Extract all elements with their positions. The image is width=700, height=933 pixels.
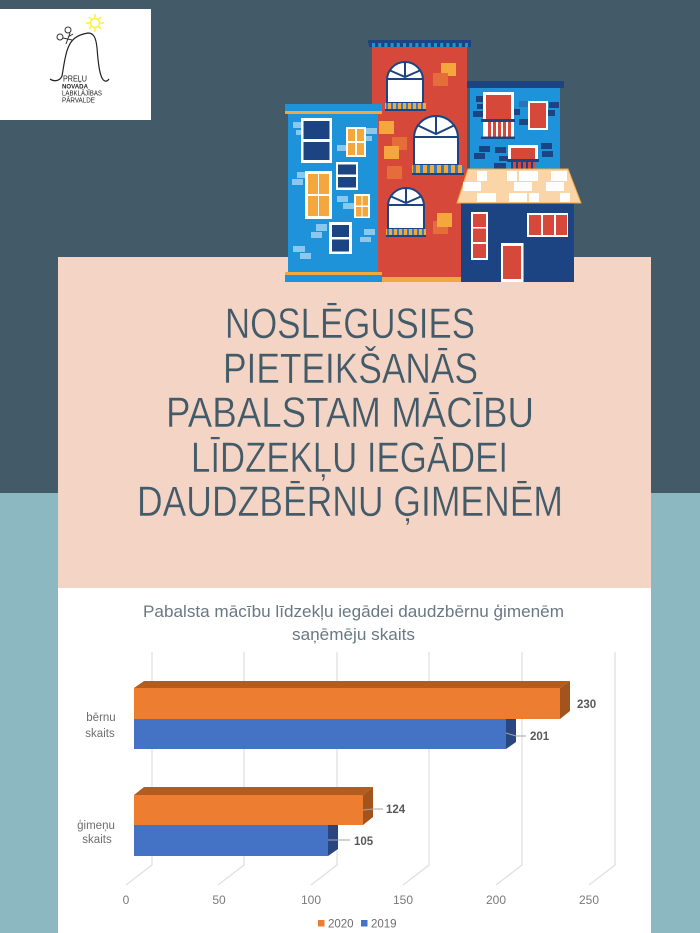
logo: Preiļu novada Labklājības pārvalde: PĀRVALDE xyxy=(62,96,95,104)
panel: chart card xyxy=(58,588,651,933)
legend xyxy=(318,918,397,930)
bar: bērnu skaits 2019 = 201 xyxy=(134,719,516,749)
logo: Preiļu novada Labklājības pārvalde: PREĻU xyxy=(63,74,87,84)
x axis labels: 200 xyxy=(486,893,506,907)
chart: 3D horizontal bar chart xyxy=(77,602,615,930)
building: red tower xyxy=(368,40,471,282)
title: DAUDZBĒRNU ĢIMENĒM xyxy=(137,478,563,526)
bar: ģimeņu skaits 2020 = 124 xyxy=(134,787,373,825)
category labels xyxy=(77,712,116,846)
logo: Preiļu novada Labklājības pārvalde: NOVADA xyxy=(62,84,88,90)
title xyxy=(137,300,563,526)
chart title: saņēmēju skaits xyxy=(292,625,415,644)
illustration: row of houses xyxy=(285,40,581,282)
chart title xyxy=(143,602,564,644)
title: PIETEIKŠANĀS xyxy=(223,345,478,393)
panel: title card xyxy=(58,257,651,588)
legend: 2020 xyxy=(328,918,354,930)
logo: Preiļu novada Labklājības pārvalde: LABKLĀJĪBAS xyxy=(62,90,102,98)
chart title: Pabalsta mācību līdzekļu iegādei daudzbērnu ģimenēm xyxy=(143,602,564,621)
building: left blue house xyxy=(285,104,382,282)
title: LĪDZEKĻU IEGĀDEI xyxy=(191,434,508,482)
category labels: skaits xyxy=(82,834,112,846)
building: navy house with tiled roof xyxy=(457,169,581,282)
category labels: bērnu xyxy=(86,712,116,724)
x axis labels: 100 xyxy=(301,893,321,907)
x axis labels: 250 xyxy=(579,893,599,907)
value labels: 124 xyxy=(386,804,406,816)
category labels: ģimeņu xyxy=(77,819,115,832)
value labels: 105 xyxy=(354,836,374,848)
category labels: skaits xyxy=(85,728,115,740)
title: PABALSTAM MĀCĪBU xyxy=(166,389,534,437)
legend: 2019 xyxy=(371,918,397,930)
background: teal lower band xyxy=(0,493,700,933)
value labels: 230 xyxy=(577,699,596,711)
value labels xyxy=(354,699,596,848)
x axis labels: 150 xyxy=(393,893,413,907)
bar: ģimeņu skaits 2019 = 105 xyxy=(134,825,338,856)
building: right blue house xyxy=(467,81,564,172)
bar: bērnu skaits 2020 = 230 xyxy=(134,681,570,719)
x axis labels xyxy=(123,893,599,907)
background: dark upper band xyxy=(0,0,700,493)
title: NOSLĒGUSIES xyxy=(225,300,475,348)
value labels: 201 xyxy=(530,731,550,743)
x axis labels: 50 xyxy=(212,893,226,907)
x axis labels: 0 xyxy=(123,893,130,907)
logo: Preiļu novada Labklājības pārvalde xyxy=(0,9,151,120)
